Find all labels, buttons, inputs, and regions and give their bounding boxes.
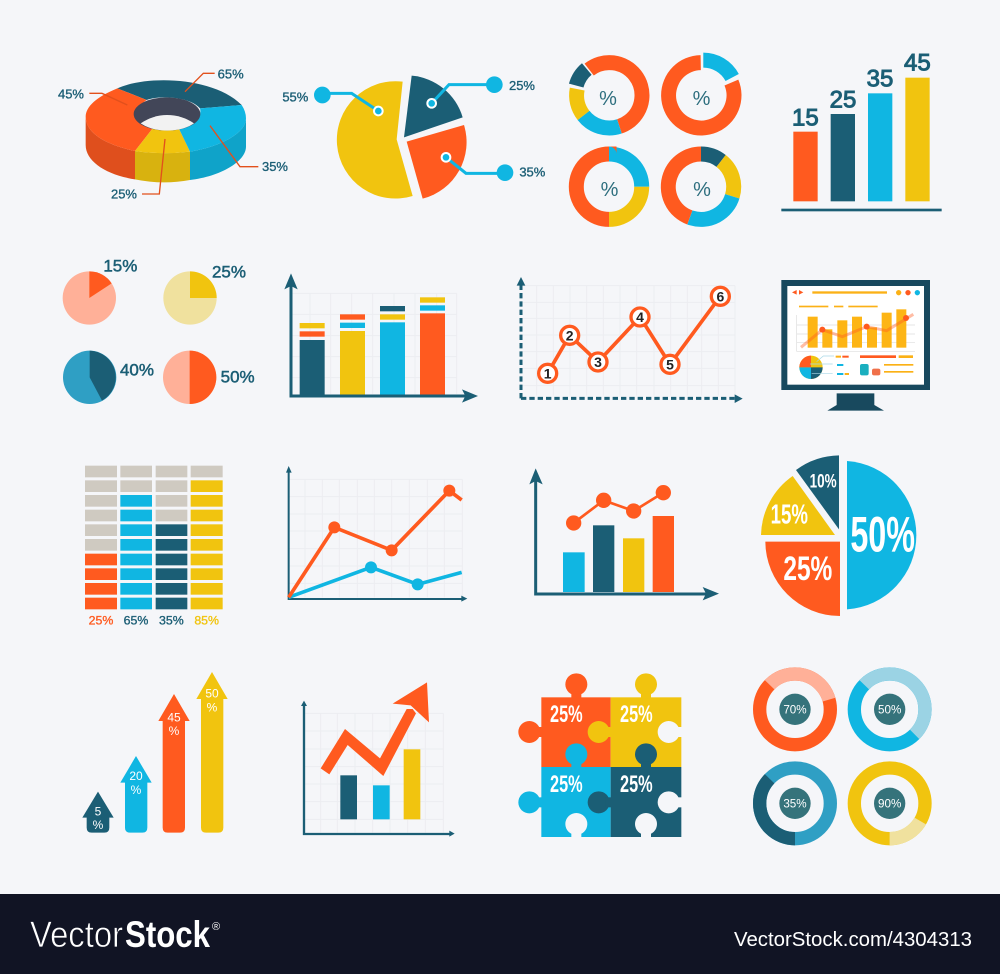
knob blue top (565, 743, 587, 768)
arrow 5%: % (93, 818, 104, 832)
numbered line chart: 5 (666, 356, 674, 372)
puzzle pieces (518, 673, 682, 837)
donut percent signs: % (599, 88, 617, 110)
pie 40%: 40% (120, 361, 154, 380)
pie 25% (163, 262, 246, 325)
stacked percent grid (85, 466, 223, 627)
dark piece label: 25% (620, 771, 653, 798)
numbered line chart: 1 (544, 365, 552, 381)
yellow piece label: 25% (620, 701, 653, 728)
pie 25%: 25% (212, 262, 246, 281)
four small pies (63, 257, 255, 404)
numbered line chart (517, 277, 743, 403)
knob dark left (588, 791, 612, 813)
value 25: 25 (830, 87, 856, 114)
donut 4 (655, 141, 747, 233)
blue piece label: 25% (550, 771, 583, 798)
arrow 5% (82, 792, 114, 833)
label 25%: 25% (89, 613, 113, 627)
ring 35%: 35% (783, 798, 807, 811)
donut 2 (658, 52, 744, 138)
numbered line chart: 4 (636, 309, 644, 325)
progress rings (745, 659, 940, 852)
knob orange left (518, 721, 543, 743)
value 15: 15 (792, 104, 819, 131)
label 35%: 35% (262, 159, 288, 174)
footer bar (0, 894, 1000, 974)
ring 50%: 50% (878, 704, 901, 717)
donut 1 (563, 49, 655, 141)
ring 70%: 70% (783, 704, 807, 717)
label 25%: 25% (111, 186, 137, 201)
logo wordmark: ® (212, 921, 220, 933)
growth chart with arrow (301, 682, 455, 837)
knob dark top (635, 743, 657, 768)
donut percent signs: % (601, 179, 619, 201)
sockets (565, 721, 682, 837)
orange piece label: 25% (550, 701, 583, 728)
value 35: 35 (867, 65, 893, 92)
10% label: 10% (810, 471, 837, 492)
donut percent signs: % (693, 88, 711, 110)
value 45: 45 (904, 50, 931, 77)
arrow 45% (158, 694, 190, 833)
four percent donuts (563, 49, 747, 233)
exploded pie chart with callouts (282, 76, 546, 199)
15% label: 15% (771, 499, 808, 530)
image id: VectorStock.com/4304313 (734, 929, 972, 951)
rising arrows (82, 672, 228, 833)
segmented pie chart (761, 455, 916, 616)
donut percent signs (599, 88, 711, 201)
knob orange top (565, 673, 587, 698)
arrow 20% (120, 756, 152, 833)
knob yellow top (635, 673, 657, 698)
two-series line chart (286, 466, 467, 602)
ring 70% (745, 659, 845, 759)
arrow 50% (196, 672, 228, 833)
ring 35% (760, 768, 830, 839)
50% label: 50% (850, 506, 915, 562)
numbered line chart: 6 (716, 288, 724, 304)
numbered line chart: 3 (594, 354, 602, 370)
pie 15% (63, 257, 137, 325)
arrow 50%: 50 (205, 687, 219, 701)
label 35%: 35% (159, 613, 184, 627)
arrow 20%: 20 (129, 769, 143, 783)
stacked bar chart (284, 273, 478, 403)
label 55%: 55% (282, 89, 309, 104)
combo bar and line chart (529, 468, 719, 600)
knob blue left (518, 791, 543, 813)
label 65%: 65% (218, 66, 244, 81)
pie 15%: 15% (103, 257, 137, 276)
pie 50% (163, 351, 255, 404)
donut percent signs: % (693, 179, 711, 201)
label 35%: 35% (519, 165, 546, 180)
label 85%: 85% (194, 613, 219, 627)
icon: monitor dashboard (781, 280, 930, 411)
3D donut chart (58, 66, 288, 201)
arrow 5%: 5 (95, 804, 102, 818)
25% label: 25% (783, 550, 832, 588)
label 25%: 25% (509, 78, 535, 93)
pie 50%: 50% (221, 367, 255, 386)
ring 50% (840, 659, 940, 759)
arrow 45%: 45 (167, 710, 181, 724)
arrow 45%: % (169, 724, 180, 738)
numbered line chart: 2 (566, 327, 574, 343)
donut 3 (576, 154, 642, 219)
logo wordmark (30, 914, 220, 955)
logo wordmark: Stock (125, 914, 210, 955)
pie 40% (63, 351, 154, 404)
label 65%: 65% (124, 613, 148, 627)
ring 90% (841, 755, 938, 852)
arrow 50%: % (207, 700, 218, 714)
simple bar chart top right (781, 50, 942, 211)
knob yellow left (588, 721, 612, 743)
ring 90%: 90% (878, 798, 901, 811)
logo wordmark: Vector (30, 914, 123, 955)
label 45%: 45% (58, 87, 84, 102)
arrow 20%: % (131, 783, 142, 797)
